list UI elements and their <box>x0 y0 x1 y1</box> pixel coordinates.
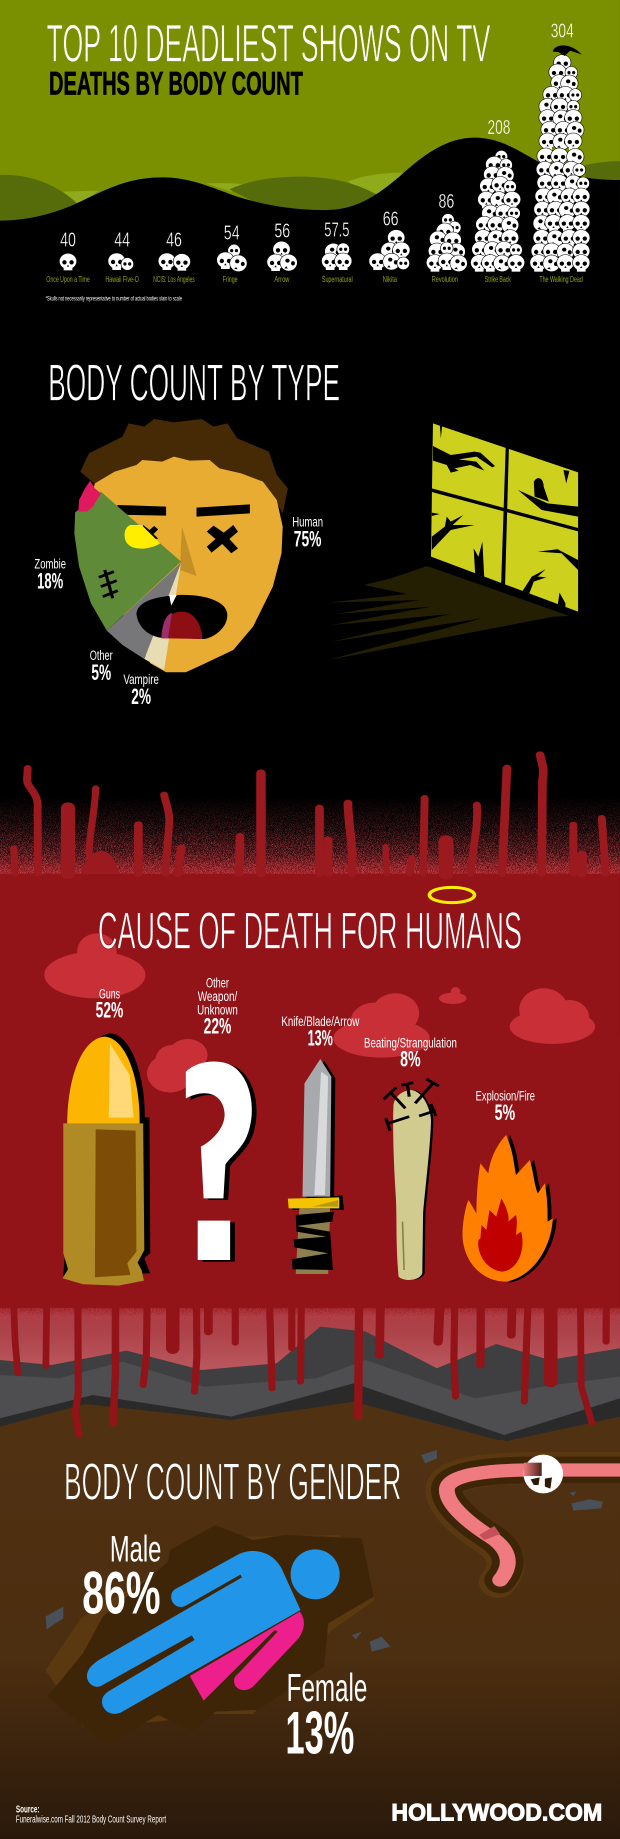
skull pile: NCIS Los Angeles 46 <box>153 228 195 285</box>
label: explosion 5%: 5% <box>495 1101 515 1125</box>
skull pile: Fringe 54 <box>217 220 247 285</box>
weapons <box>62 1033 557 1286</box>
skull pile: The Walking Dead 304: 304 <box>551 18 574 42</box>
window shadow <box>328 566 569 660</box>
source: Funeralwise.com Fall 2012 Body Count Survey Report <box>16 1814 166 1825</box>
cloud: right <box>510 988 595 1044</box>
section: top 10 deadliest shows <box>0 0 620 320</box>
skull pile: Arrow 56: 56 <box>274 218 290 242</box>
skull pile: Arrow 56: Arrow <box>274 275 290 285</box>
section: top 10 deadliest shows: NCIS: Los Angeles <box>153 275 195 285</box>
label: human 75% <box>292 515 323 552</box>
section: blood spray <box>0 755 620 1073</box>
label: other weapon 22%: 22% <box>204 1014 231 1039</box>
pink sky below blood <box>0 1307 620 1373</box>
label: other 5%: Other <box>90 648 113 664</box>
label: guns 52% <box>96 986 123 1023</box>
exposed brain <box>78 481 101 512</box>
label: human 75%: Human <box>292 515 323 530</box>
other slice <box>107 563 181 659</box>
fang <box>169 595 177 606</box>
cloud: center <box>333 993 430 1058</box>
blood streaks rising <box>14 755 606 873</box>
female figure <box>190 1612 304 1701</box>
skull pile: Strike Back 208 <box>471 115 525 285</box>
zombie slice <box>74 492 181 631</box>
dirt background <box>0 1440 620 1839</box>
blob at streak base <box>81 851 121 873</box>
skull pile: Nikita 66 <box>369 206 410 285</box>
hair <box>80 419 288 513</box>
label: vampire 2%: 2% <box>131 685 151 709</box>
skull pile: Once Upon a Time 40 <box>46 228 90 285</box>
skull pile: Once Upon a Time 40: 40 <box>60 228 76 251</box>
rocks <box>45 1450 603 1652</box>
source: Source: <box>16 1804 40 1815</box>
tree branches and crow <box>432 423 578 609</box>
pink spray grain <box>0 1308 620 1332</box>
source <box>16 1804 166 1825</box>
window panes <box>431 423 578 612</box>
skull pile: Supernatural 57.5: Supernatural <box>322 275 353 285</box>
skull pile: Strike Back 208: 208 <box>488 115 510 139</box>
label: guns 52%: 52% <box>96 998 123 1023</box>
skull pile: Revolution 86: Revolution <box>432 275 458 285</box>
skull pile: Revolution 86: 86 <box>438 189 454 213</box>
label: beating 8% <box>364 1035 457 1072</box>
subtitle: DEATHS BY BODY COUNT <box>49 66 303 102</box>
cloud: small <box>439 987 467 1004</box>
rock layer back <box>0 1327 620 1473</box>
skull pile: Hawaii Five-O 44 <box>105 228 139 285</box>
label: female 13%: Female <box>287 1666 367 1709</box>
skull pile: Supernatural 57.5 <box>321 218 353 285</box>
blood drips <box>14 1307 606 1435</box>
skull pile: NCIS Los Angeles 46: 46 <box>166 228 182 251</box>
label: other 5%: 5% <box>91 661 111 685</box>
section: body count by type <box>34 354 578 709</box>
mouth <box>136 595 227 639</box>
vampire slice <box>144 563 181 670</box>
skull pile: Fringe 54: Fringe <box>223 275 238 285</box>
label: female 13% <box>285 1666 367 1767</box>
skull pile: The Walking Dead 304 <box>530 18 590 285</box>
skull pile: Nikita 66: Nikita <box>383 275 397 285</box>
label: other 5% <box>90 648 113 685</box>
label: vampire 2%: Vampire <box>123 672 159 688</box>
male figure <box>87 1549 340 1714</box>
skull pile: Supernatural 57.5: 57.5 <box>324 218 350 241</box>
red panel bottom <box>0 1037 620 1310</box>
label: zombie 18%: 18% <box>37 569 63 594</box>
label: beating 8%: Beating/Strangulation <box>364 1035 457 1051</box>
skull pile: Strike Back 208: Strike Back <box>485 275 511 285</box>
green sky and hills <box>0 0 620 320</box>
cloud: upper left <box>44 933 146 998</box>
icon: worm and skull <box>444 1455 620 1582</box>
label: male 86%: Male <box>110 1528 161 1570</box>
spray gradient <box>0 830 620 874</box>
label: other weapon 22%: Unknown <box>197 1002 238 1018</box>
icon: halo <box>429 887 474 903</box>
label: knife 13%: Knife/Blade/Arrow <box>281 1014 360 1030</box>
icon: knife <box>288 1059 344 1274</box>
icon: question mark <box>186 1061 257 1262</box>
label: male 86% <box>82 1528 161 1627</box>
icon: crow on skull tower <box>553 45 582 56</box>
skull pile: Fringe 54: 54 <box>224 220 240 244</box>
rock layer edge <box>0 1383 620 1473</box>
label: female 13%: 13% <box>285 1700 354 1767</box>
label: other weapon 22%: Weapon/ <box>198 989 238 1005</box>
zombie eye <box>125 525 160 549</box>
skull pile: Hawaii Five-O 44: Hawaii Five-O <box>105 275 139 285</box>
label: vampire 2% <box>123 672 159 709</box>
skull pile: Hawaii Five-O 44: 44 <box>114 228 130 251</box>
label: knife 13% <box>281 1014 360 1051</box>
pie chart: face <box>74 419 288 672</box>
skull pile: Revolution 86 <box>426 189 467 285</box>
section: body count by gender <box>0 1440 620 1839</box>
red panel top <box>0 873 620 1073</box>
label: male 86%: 86% <box>82 1560 161 1627</box>
cloud: behind question mark <box>147 1039 208 1093</box>
section: weapons backdrop <box>0 1037 620 1473</box>
tongue <box>161 612 202 639</box>
label: explosion 5%: Explosion/Fire <box>476 1089 535 1104</box>
nose <box>180 527 197 576</box>
icon: spiked bat <box>384 1079 439 1280</box>
skull pile: Nikita 66: 66 <box>383 206 399 230</box>
rock layer front <box>0 1360 620 1473</box>
label: beating 8%: 8% <box>400 1047 421 1072</box>
stitches <box>99 570 118 598</box>
label: other weapon 22% <box>197 975 238 1039</box>
label: explosion 5% <box>476 1089 535 1125</box>
label: zombie 18% <box>34 556 66 594</box>
window illustration <box>328 423 578 660</box>
spray grain <box>0 797 620 874</box>
crossed eye <box>142 525 238 553</box>
label: other weapon 22%: Other <box>206 975 229 991</box>
icon: flame <box>462 1135 557 1283</box>
label: knife 13%: 13% <box>308 1026 333 1051</box>
skull pile: Once Upon a Time 40: Once Upon a Time <box>46 275 90 285</box>
body outline in dirt <box>45 1525 375 1745</box>
footnote: *Skulls not necessarily representative to number of actual bodies slain to scale <box>45 296 182 302</box>
window frame <box>432 447 578 591</box>
label: guns 52%: Guns <box>99 986 120 1002</box>
label: human 75%: 75% <box>294 528 321 552</box>
section: cause of death headings and clouds <box>44 887 595 1093</box>
icon: bullet <box>62 1033 150 1286</box>
human slice <box>79 457 283 672</box>
eyebrows <box>117 504 250 517</box>
dirt ground <box>0 1402 620 1473</box>
label: zombie 18%: Zombie <box>34 556 66 572</box>
skull pile: Arrow 56 <box>267 218 297 285</box>
